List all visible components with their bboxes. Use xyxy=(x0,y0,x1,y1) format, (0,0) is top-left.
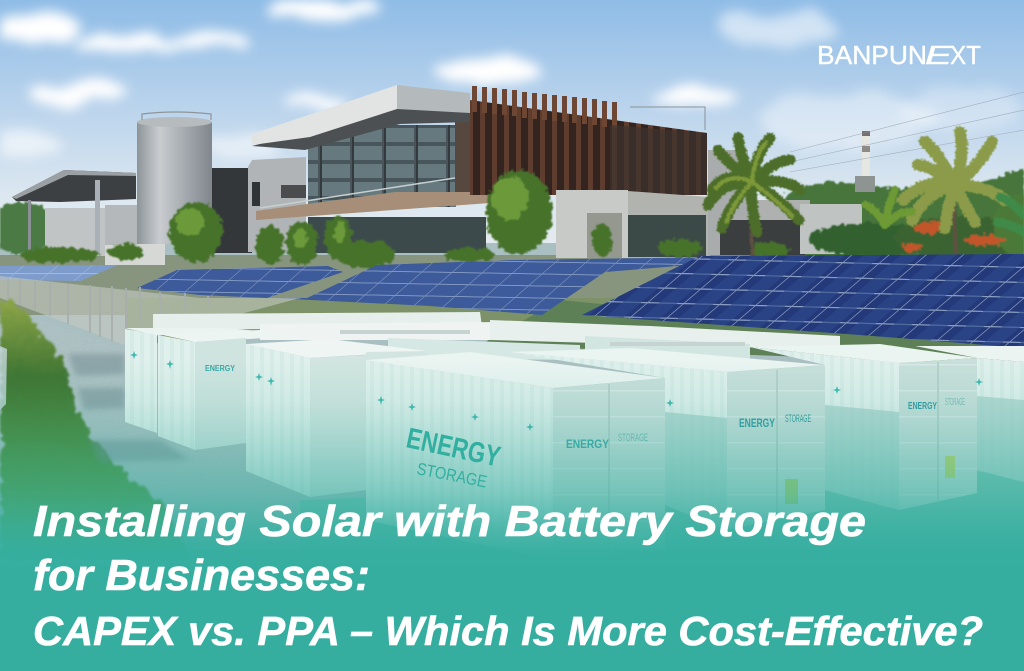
teal footer base xyxy=(0,569,1024,671)
title: Installing Solar with Battery Storage xyxy=(33,497,866,546)
building: left canopy xyxy=(12,170,165,265)
palm tree: right xyxy=(865,132,1024,260)
battery container 1 xyxy=(125,328,270,433)
teal sparkle marks xyxy=(130,351,983,431)
battery container 4: front with large label: STORAGE xyxy=(618,432,648,444)
solar array: right foreground xyxy=(582,254,1024,348)
clouds xyxy=(0,0,1020,159)
sky background xyxy=(0,0,1024,300)
title: CAPEX vs. PPA – Which Is More Cost-Effective? xyxy=(33,608,983,654)
solar array: far left xyxy=(0,265,118,281)
battery container 5: ENERGY xyxy=(739,416,775,430)
battery container 4: front with large label: ENERGY xyxy=(566,437,609,451)
palm tree: centre xyxy=(708,138,800,262)
power lines xyxy=(790,92,1024,172)
battery container 2 xyxy=(158,330,300,450)
battery container 6: ENERGY xyxy=(908,401,937,412)
battery containers: back rows xyxy=(153,312,840,360)
title: for Businesses: xyxy=(33,551,370,600)
building: main glass block xyxy=(252,85,490,253)
battery container 7 xyxy=(915,346,1024,482)
container label: energy storage: ENERGY xyxy=(404,423,503,474)
trees and shrubs xyxy=(20,170,1024,268)
container label: energy storage: STORAGE xyxy=(415,459,489,491)
ground and gravel xyxy=(0,243,1024,671)
gravel shadows xyxy=(68,354,190,462)
silo tank xyxy=(137,112,212,244)
battery container 5 xyxy=(510,348,825,530)
building: concrete ground floor xyxy=(556,150,862,258)
smokestack xyxy=(855,131,875,192)
building: timber slat facade xyxy=(470,86,707,195)
battery container 3 xyxy=(246,339,427,497)
solar array: centre xyxy=(272,256,800,315)
logo: Banpu Next xyxy=(817,40,981,70)
solar array: centre left xyxy=(137,266,343,298)
building: grey annex xyxy=(212,157,306,253)
battery container 5: STORAGE xyxy=(785,413,811,425)
title xyxy=(33,497,983,654)
perimeter fence xyxy=(0,276,300,345)
logo: Banpu Next: E xyxy=(925,40,953,70)
grass verge xyxy=(0,298,190,560)
teal gradient footer xyxy=(0,360,1024,570)
battery container 6: STORAGE xyxy=(945,397,965,408)
background vegetation xyxy=(0,168,1024,258)
battery container 2: ENERGY xyxy=(205,364,236,373)
logo: Banpu Next: XT xyxy=(950,40,981,70)
container label: energy storage xyxy=(404,423,503,491)
logo: Banpu Next: BANPUN xyxy=(817,40,927,70)
battery container 4: front with large label xyxy=(366,352,665,560)
battery container 6 xyxy=(750,344,977,510)
